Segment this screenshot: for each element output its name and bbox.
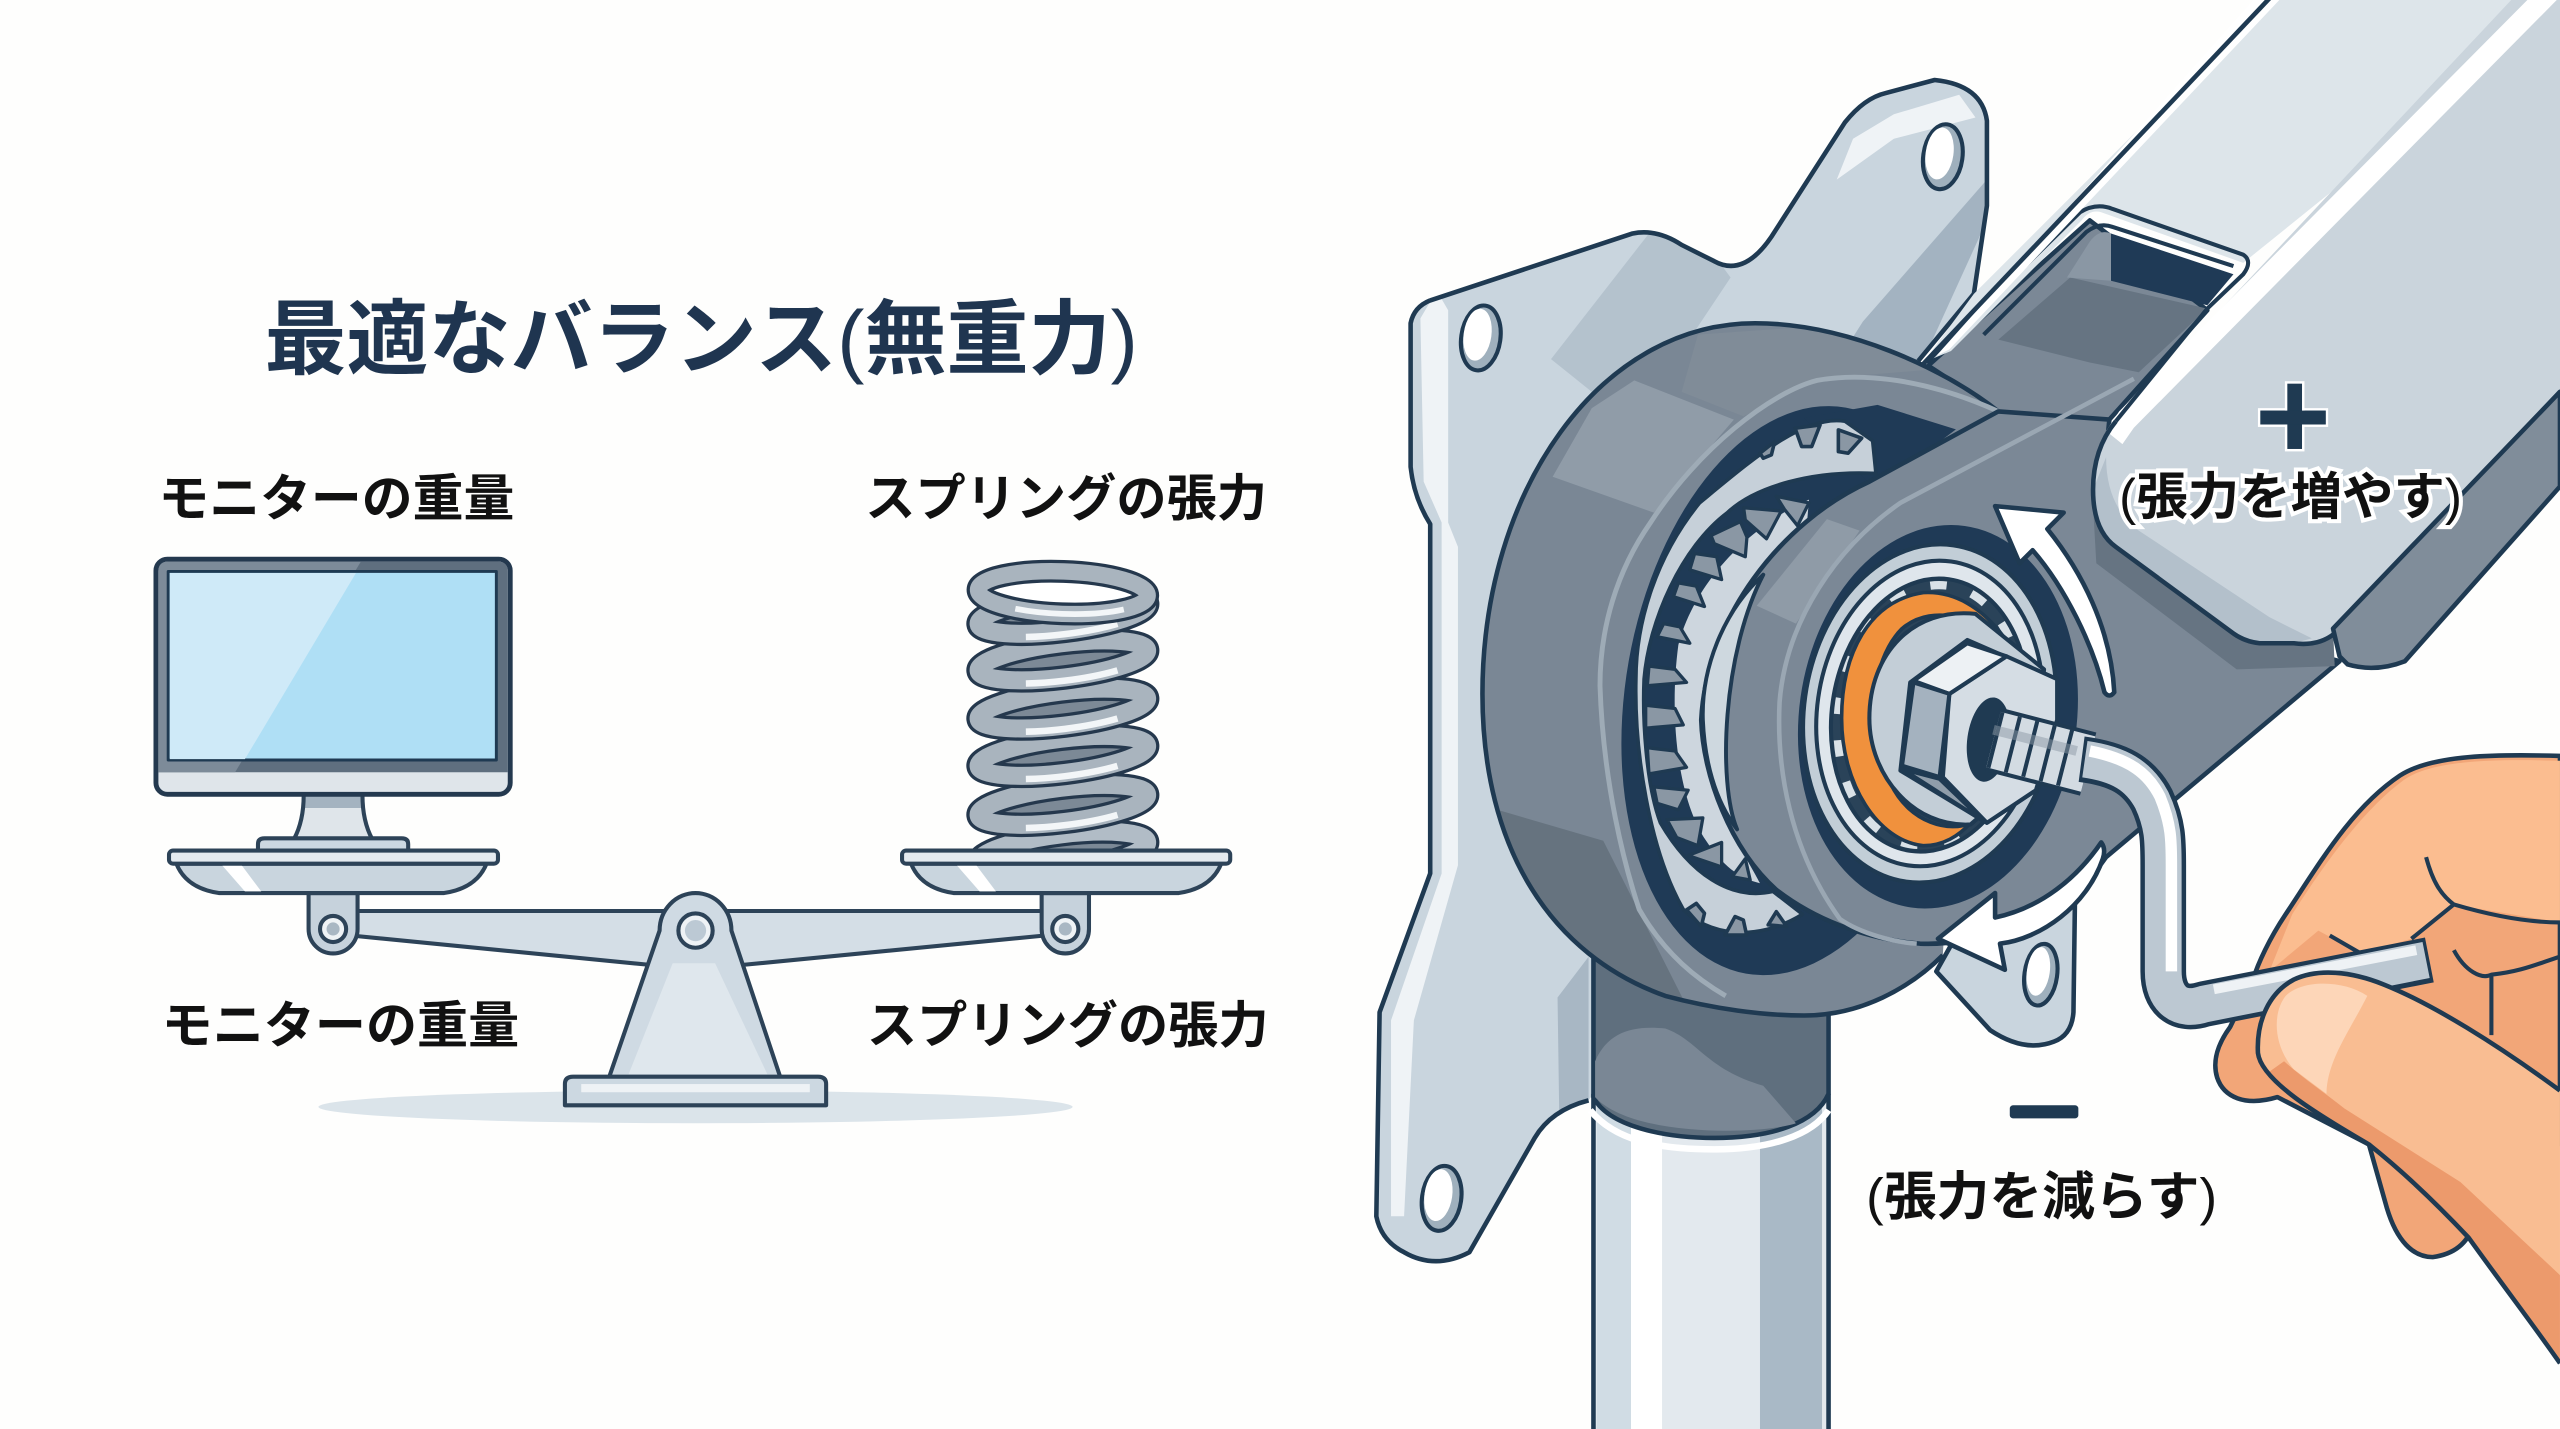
arm neck xyxy=(1878,220,2207,653)
balance scale illustration xyxy=(156,559,1230,1123)
label: monitor weight top: モニターの重量 xyxy=(158,470,514,527)
left pan xyxy=(169,851,498,893)
front hub xyxy=(1701,379,2340,944)
arm upper band xyxy=(1923,0,2560,362)
inner gear xyxy=(1646,496,1809,883)
fulcrum xyxy=(609,893,780,1078)
housing disc xyxy=(1469,323,1998,1029)
label: decrease tension: (張力を減らす) xyxy=(1866,1169,2217,1227)
back plate xyxy=(1376,80,1987,1261)
orange seal ring xyxy=(1842,593,2011,846)
right hanger xyxy=(1042,893,1089,953)
hand back and fingers xyxy=(2215,755,2560,1257)
label: spring tension bottom: スプリングの張力 xyxy=(867,997,1269,1054)
threaded bolt xyxy=(1962,695,2088,785)
hex nut xyxy=(1900,640,2057,823)
arrow: increase tension xyxy=(1995,506,2114,695)
icon: plus sign xyxy=(2260,384,2326,449)
left hanger xyxy=(309,893,358,953)
vertical pole xyxy=(1593,1094,1829,1429)
washer xyxy=(1869,613,2044,825)
plate mounting holes xyxy=(1418,122,1967,1233)
label: spring tension top: スプリングの張力 xyxy=(865,470,1267,527)
title: 最適なバランス(無重力) xyxy=(265,294,1138,385)
thumb xyxy=(2258,973,2560,1371)
scale beam xyxy=(351,911,1045,965)
arm neck shade xyxy=(1998,278,2207,372)
lower right plate lobe xyxy=(1936,890,2075,1045)
icon: minus sign xyxy=(2010,1105,2078,1118)
arm panel shadow xyxy=(2093,506,2335,669)
bearing rings xyxy=(1782,528,2078,899)
arm inner opening xyxy=(1927,206,2248,362)
gear recess xyxy=(1579,378,2013,1003)
hex key xyxy=(2082,751,2429,1006)
label: monitor weight bottom: モニターの重量 xyxy=(162,997,519,1054)
right pan xyxy=(902,851,1230,893)
scale base xyxy=(565,1077,826,1105)
mechanism illustration xyxy=(1376,0,2560,1429)
ground shadow xyxy=(318,1091,1073,1123)
outer gear ring xyxy=(1636,421,1876,935)
label: increase tension: (張力を増やす) xyxy=(2119,467,2462,525)
bearing recess xyxy=(1774,507,2102,927)
arm main panel xyxy=(1922,0,2560,668)
icon: coil spring xyxy=(976,568,1149,880)
arrow: decrease tension xyxy=(1938,842,2104,970)
icon: monitor xyxy=(156,559,510,851)
pole collar xyxy=(1590,947,1829,1149)
